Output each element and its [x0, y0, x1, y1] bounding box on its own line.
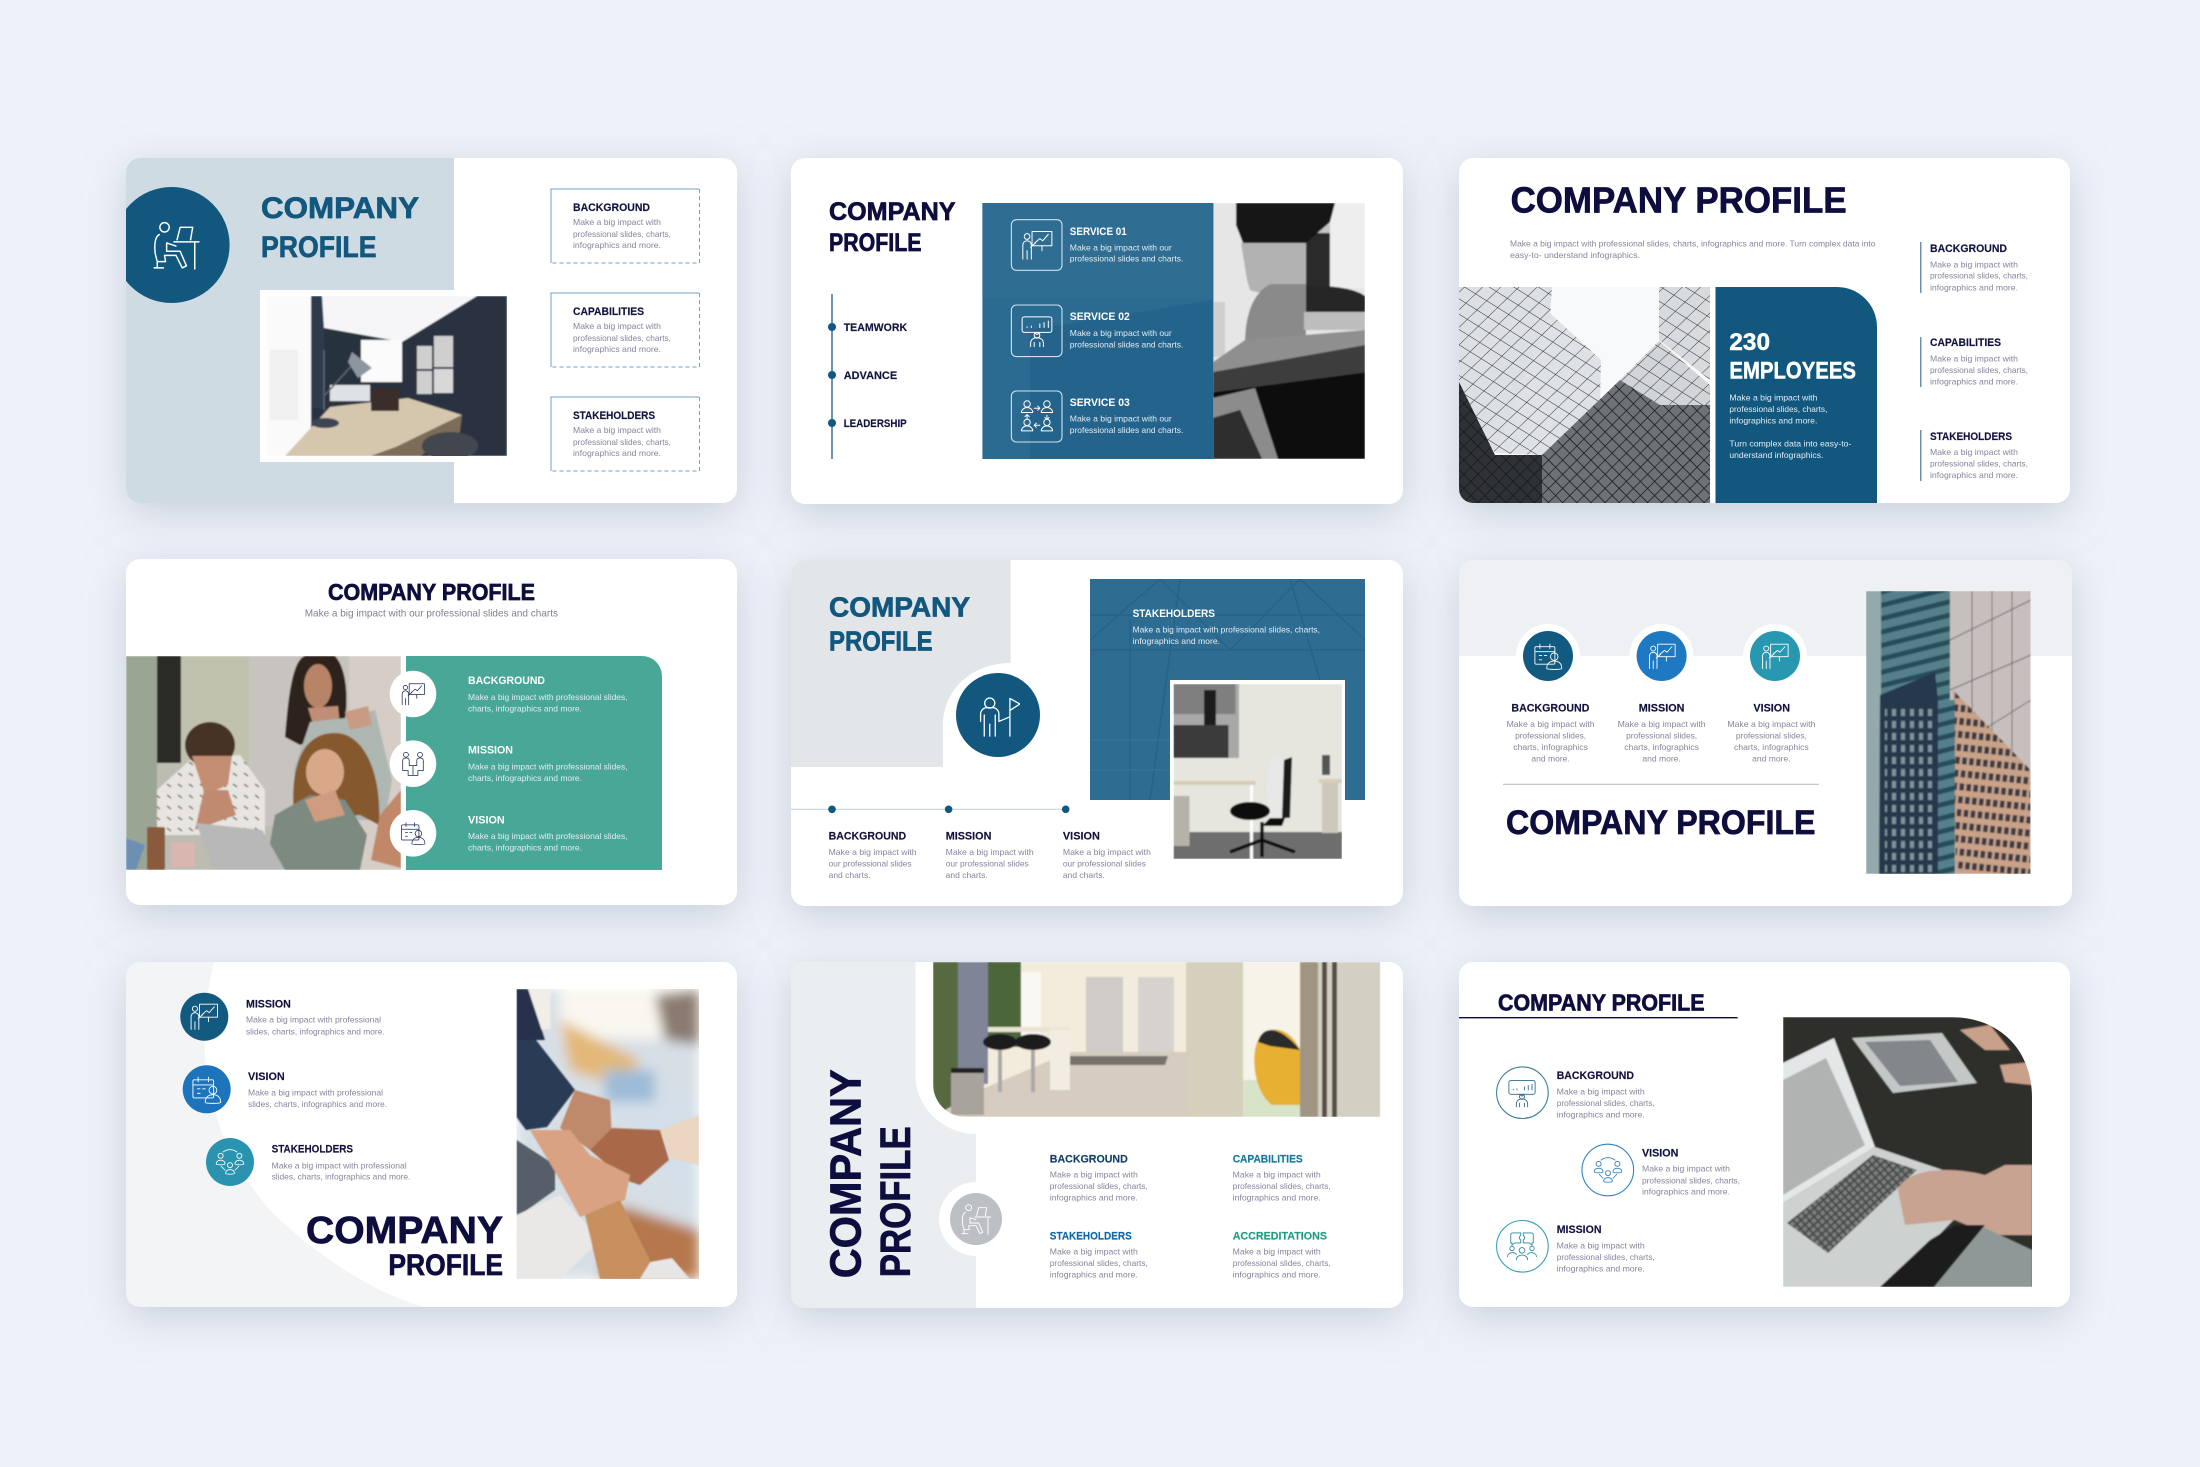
- timeline list: ADVANCE: [844, 370, 897, 382]
- text: mission: slides, charts, infographics and more.: [246, 1026, 385, 1036]
- text: mission: Make a big impact with: [1557, 1240, 1645, 1250]
- icon: background circle: [1516, 624, 1580, 688]
- text: service 03: Make a big impact with our: [1070, 414, 1172, 424]
- text: mission: Make a big impact with: [946, 847, 1034, 857]
- icon: person at desk circle: [126, 187, 230, 303]
- text: background: charts, infographics and more.: [468, 703, 582, 713]
- icon: mission: [180, 993, 228, 1041]
- heading: company profile: COMPANY: [829, 592, 970, 623]
- text: background: [468, 675, 628, 713]
- text: vision: professional slides, charts,: [1642, 1175, 1740, 1185]
- text: accreditations: [1233, 1230, 1331, 1280]
- text: background: our professional slides: [829, 858, 912, 868]
- text: stakeholders: Make a big impact with: [1050, 1247, 1138, 1257]
- text: capabilities: infographics and more.: [1233, 1193, 1321, 1203]
- text block: background: infographics and more.: [1930, 282, 2018, 292]
- panel: 230 employees stat: [1716, 287, 1877, 503]
- panel: 230 employees stat: Make a big impact with: [1729, 393, 1818, 403]
- text: vision: infographics and more.: [1642, 1187, 1730, 1197]
- text: mission: and charts.: [946, 870, 988, 880]
- text block: background: professional slides, charts,: [1930, 271, 2028, 281]
- callout: capabilities: CAPABILITIES: [573, 306, 644, 318]
- text: capabilities: professional slides, charts,: [1233, 1181, 1331, 1191]
- text: background: Make a big impact with: [1507, 719, 1595, 729]
- text: vision: Make a big impact with: [1642, 1164, 1730, 1174]
- text: background: [1557, 1070, 1655, 1119]
- text block: stakeholders: STAKEHOLDERS: [1930, 431, 2012, 443]
- text: mission: [246, 998, 385, 1036]
- text: background: charts, infographics: [1513, 742, 1588, 752]
- text: vision: VISION: [1753, 703, 1790, 715]
- text: mission: charts, infographics and more.: [468, 773, 582, 783]
- callout: capabilities: professional slides, charts,: [573, 333, 671, 343]
- icon: vision circle: [1743, 624, 1807, 688]
- callout: background: professional slides, charts,: [573, 229, 671, 239]
- heading: company profile: COMPANY PROFILE: [1511, 180, 1847, 221]
- text: vision: VISION: [1642, 1147, 1678, 1159]
- text: background: BACKGROUND: [829, 831, 906, 843]
- text: vision: Make a big impact with: [1063, 847, 1151, 857]
- text: background: [1507, 703, 1595, 764]
- heading: company profile: [306, 1210, 503, 1282]
- text: stakeholders: [1050, 1230, 1148, 1280]
- heading: vertical company profile: [821, 1069, 920, 1278]
- icon: mission: [390, 740, 436, 787]
- text: mission: infographics and more.: [1557, 1263, 1645, 1273]
- text: stakeholders: professional slides, charts,: [1050, 1258, 1148, 1268]
- callout: background: BACKGROUND: [573, 202, 650, 214]
- text block: capabilities: CAPABILITIES: [1930, 337, 2001, 349]
- text block: capabilities: professional slides, charts,: [1930, 365, 2028, 375]
- photo: office lobby: [933, 962, 1381, 1117]
- panel: blue services overlay: [982, 203, 1213, 459]
- callout: background: [551, 189, 700, 263]
- text: mission: our professional slides: [946, 858, 1029, 868]
- heading: company profile: PROFILE: [829, 229, 922, 257]
- callout: background: infographics and more.: [573, 240, 661, 250]
- text block: background: Make a big impact with: [1930, 259, 2018, 269]
- icon: mission circle: [1630, 624, 1694, 688]
- photo: dark office: [260, 290, 507, 462]
- panel: 230 employees stat: EMPLOYEES: [1729, 358, 1856, 385]
- text block: capabilities: Make a big impact with: [1930, 354, 2018, 364]
- heading: company profile: [261, 192, 419, 264]
- text: background: BACKGROUND: [1557, 1070, 1634, 1082]
- panel: 230 employees stat: understand infographics.: [1729, 450, 1823, 460]
- text: service 02: SERVICE 02: [1070, 311, 1130, 323]
- text: mission: MISSION: [1557, 1224, 1602, 1236]
- heading: company profile: COMPANY: [829, 198, 956, 226]
- icon: background: [390, 671, 436, 717]
- text: mission: MISSION: [468, 745, 513, 757]
- text: background: Make a big impact with professional slides,: [468, 692, 628, 702]
- text block: capabilities: infographics and more.: [1930, 377, 2018, 387]
- panel: blue stakeholders: STAKEHOLDERS: [1133, 608, 1215, 620]
- icon: service 02: [1011, 305, 1062, 357]
- text block: stakeholders: infographics and more.: [1930, 470, 2018, 480]
- text: mission: MISSION: [246, 998, 291, 1010]
- panel: blue stakeholders: [1090, 579, 1365, 800]
- text: service 02: Make a big impact with our: [1070, 328, 1172, 338]
- text: mission: Make a big impact with: [1618, 719, 1706, 729]
- heading: company profile: [829, 198, 956, 257]
- text: background: [829, 831, 917, 880]
- text: accreditations: infographics and more.: [1233, 1270, 1321, 1280]
- text: capabilities: [1233, 1153, 1331, 1203]
- text: vision: and more.: [1752, 754, 1791, 764]
- text: intro paragraph: easy-to- understand infographics.: [1510, 250, 1640, 260]
- text: vision: Make a big impact with: [1727, 719, 1816, 729]
- panel: 230 employees stat: 230: [1729, 329, 1770, 356]
- text: background: professional slides, charts,: [1050, 1181, 1148, 1191]
- text: stakeholders: [272, 1144, 410, 1182]
- text: background: Make a big impact with: [1050, 1170, 1138, 1180]
- text: background: and more.: [1531, 754, 1570, 764]
- panel: slide 3 employees: [1459, 158, 2070, 503]
- text: service 02: [1070, 311, 1183, 350]
- text: mission: charts, infographics: [1624, 742, 1699, 752]
- text: service 02: professional slides and charts.: [1070, 340, 1183, 350]
- text: vision: [1642, 1147, 1740, 1197]
- panel: slide 2 services: [791, 158, 1403, 504]
- panel: 230 employees stat: professional slides, charts,: [1729, 404, 1827, 414]
- panel: 230 employees stat: Turn complex data into easy-to-: [1729, 439, 1852, 449]
- photo: office tower: [1866, 591, 2031, 874]
- text: accreditations: Make a big impact with: [1233, 1247, 1321, 1257]
- panel: slide 1 company profile with office photo: [114, 158, 737, 503]
- icon: stakeholders: [206, 1138, 254, 1186]
- text: background: Make a big impact with: [829, 847, 917, 857]
- text: background: professional slides, charts,: [1557, 1098, 1655, 1108]
- text block: background: BACKGROUND: [1930, 243, 2007, 255]
- text: mission: MISSION: [946, 831, 991, 843]
- text: vision: our professional slides: [1063, 858, 1146, 868]
- text: background: BACKGROUND: [1511, 703, 1589, 715]
- timeline list: TEAMWORK: [844, 322, 907, 334]
- panel: slide 8 vertical title and office lobby: [791, 962, 1403, 1308]
- text: accreditations: professional slides, charts,: [1233, 1258, 1331, 1268]
- text: vision: VISION: [248, 1071, 285, 1083]
- text block: stakeholders: professional slides, charts,: [1930, 458, 2028, 468]
- heading: company profile: COMPANY PROFILE: [1498, 990, 1704, 1016]
- callout: stakeholders: professional slides, charts,: [573, 437, 671, 447]
- text block: stakeholders: Make a big impact with: [1930, 447, 2018, 457]
- icon: service 01: [1011, 220, 1062, 270]
- heading: company profile: [829, 592, 970, 657]
- text block: stakeholders: [1920, 430, 2028, 481]
- panel: blue stakeholders: infographics and more.: [1133, 636, 1220, 646]
- heading: company profile: PROFILE: [388, 1249, 503, 1282]
- text: intro paragraph: Make a big impact with professional slides, charts, infographics and more. Turn complex data into: [1510, 239, 1876, 249]
- text: stakeholders: infographics and more.: [1050, 1270, 1138, 1280]
- text: vision: [468, 815, 628, 852]
- heading: company profile: COMPANY: [306, 1210, 503, 1252]
- text: mission: professional slides, charts,: [1557, 1252, 1655, 1262]
- icon: service 03: [1011, 391, 1062, 442]
- text: vision: charts, infographics and more.: [468, 842, 582, 852]
- photo: team around laptop: [126, 656, 401, 870]
- callout: stakeholders: STAKEHOLDERS: [573, 410, 655, 422]
- text: background: Make a big impact with: [1557, 1086, 1645, 1096]
- text: service 01: SERVICE 01: [1070, 226, 1127, 238]
- text: intro paragraph: [1510, 239, 1876, 260]
- panel: 230 employees stat: infographics and more.: [1729, 416, 1817, 426]
- text: stakeholders: Make a big impact with professional: [272, 1160, 407, 1170]
- callout: stakeholders: infographics and more.: [573, 448, 661, 458]
- text: capabilities: CAPABILITIES: [1233, 1153, 1303, 1165]
- text: vision: professional slides,: [1736, 731, 1807, 741]
- text: vision: Make a big impact with professional slides,: [468, 831, 628, 841]
- timeline list: [828, 294, 907, 459]
- text: service 01: Make a big impact with our: [1070, 242, 1172, 252]
- heading: company profile: COMPANY PROFILE: [328, 579, 535, 605]
- text: subtitle: Make a big impact with our professional slides and charts: [305, 607, 558, 619]
- callout: stakeholders: [551, 397, 700, 471]
- icon: background: [1497, 1067, 1548, 1118]
- text: mission: [1557, 1224, 1655, 1273]
- icon: vision: [183, 1065, 231, 1113]
- heading: company profile: PROFILE: [829, 626, 933, 657]
- panel: slide 7 handshake team: [126, 962, 737, 1307]
- icon: person at desk gray circle: [950, 1193, 1002, 1245]
- text: mission: and more.: [1642, 754, 1681, 764]
- panel: slide 9 laptop photo: [1459, 962, 2070, 1307]
- callout: stakeholders: Make a big impact with: [573, 425, 661, 435]
- text block: background: [1920, 242, 2028, 293]
- panel: slide 4 team photo and teal list: [126, 559, 737, 905]
- callout: capabilities: Make a big impact with: [573, 321, 661, 331]
- panel: blue stakeholders: Make a big impact with professional slides, charts,: [1133, 625, 1320, 635]
- text: service 01: [1070, 226, 1183, 264]
- callout: capabilities: infographics and more.: [573, 344, 661, 354]
- text: mission: professional slides,: [1626, 731, 1697, 741]
- text: mission: [468, 745, 628, 783]
- text: stakeholders: STAKEHOLDERS: [1050, 1230, 1132, 1242]
- photo: glass buildings: [1459, 287, 1710, 503]
- text: capabilities: Make a big impact with: [1233, 1170, 1321, 1180]
- text: vision: [1727, 703, 1816, 764]
- icon: person with flag: [956, 673, 1040, 757]
- text: stakeholders: STAKEHOLDERS: [272, 1144, 353, 1156]
- text: mission: Make a big impact with professional: [246, 1015, 381, 1025]
- text: service 03: SERVICE 03: [1070, 397, 1130, 409]
- text: background: BACKGROUND: [468, 675, 545, 687]
- text: vision: [248, 1071, 387, 1109]
- text: mission: MISSION: [1639, 703, 1685, 715]
- heading: company profile: PROFILE: [261, 231, 376, 264]
- text: service 03: [1070, 397, 1183, 435]
- text: background: and charts.: [829, 870, 871, 880]
- icon: vision: [1582, 1144, 1634, 1196]
- icon: vision: [390, 810, 436, 857]
- photo: white office with chair: [1170, 680, 1345, 859]
- callout: capabilities: [551, 293, 700, 367]
- text: vision: charts, infographics: [1734, 742, 1809, 752]
- text: background: infographics and more.: [1557, 1109, 1645, 1119]
- text: vision: Make a big impact with professional: [248, 1087, 383, 1097]
- heading: company profile: COMPANY: [261, 192, 419, 225]
- heading: vertical company profile: COMPANY: [821, 1069, 870, 1278]
- text: background: infographics and more.: [1050, 1193, 1138, 1203]
- text: mission: Make a big impact with professional slides,: [468, 761, 628, 771]
- text: vision: and charts.: [1063, 870, 1105, 880]
- timeline: [791, 806, 1069, 813]
- text: mission: [946, 831, 1034, 880]
- photo: stacked hands: [516, 989, 699, 1279]
- text: background: BACKGROUND: [1050, 1153, 1128, 1165]
- heading: vertical company profile: PROFILE: [872, 1126, 920, 1277]
- text: vision: [1063, 831, 1151, 880]
- text: service 01: professional slides and charts.: [1070, 254, 1183, 264]
- text: stakeholders: slides, charts, infographics and more.: [272, 1172, 410, 1182]
- callout: background: Make a big impact with: [573, 217, 661, 227]
- icon: mission: [1497, 1220, 1548, 1272]
- text: background: professional slides,: [1515, 731, 1586, 741]
- photo: man at desk grayscale: [1213, 203, 1365, 459]
- photo: laptops on table: [1783, 1017, 2033, 1287]
- text block: capabilities: [1920, 337, 2028, 387]
- panel: slide 6 three circles and building: [1459, 560, 2072, 906]
- text: background: [1050, 1153, 1148, 1203]
- heading: company profile: COMPANY PROFILE: [1506, 804, 1816, 842]
- panel: slide 5 stakeholders and timeline: [791, 560, 1403, 906]
- timeline list: LEADERSHIP: [844, 418, 907, 430]
- text: vision: VISION: [468, 815, 505, 827]
- text: vision: VISION: [1063, 831, 1100, 843]
- text: vision: slides, charts, infographics and more.: [248, 1099, 387, 1109]
- panel: teal list: [390, 656, 662, 870]
- text: service 03: professional slides and charts.: [1070, 425, 1183, 435]
- text: mission: [1618, 703, 1706, 764]
- text: accreditations: ACCREDITATIONS: [1233, 1230, 1327, 1242]
